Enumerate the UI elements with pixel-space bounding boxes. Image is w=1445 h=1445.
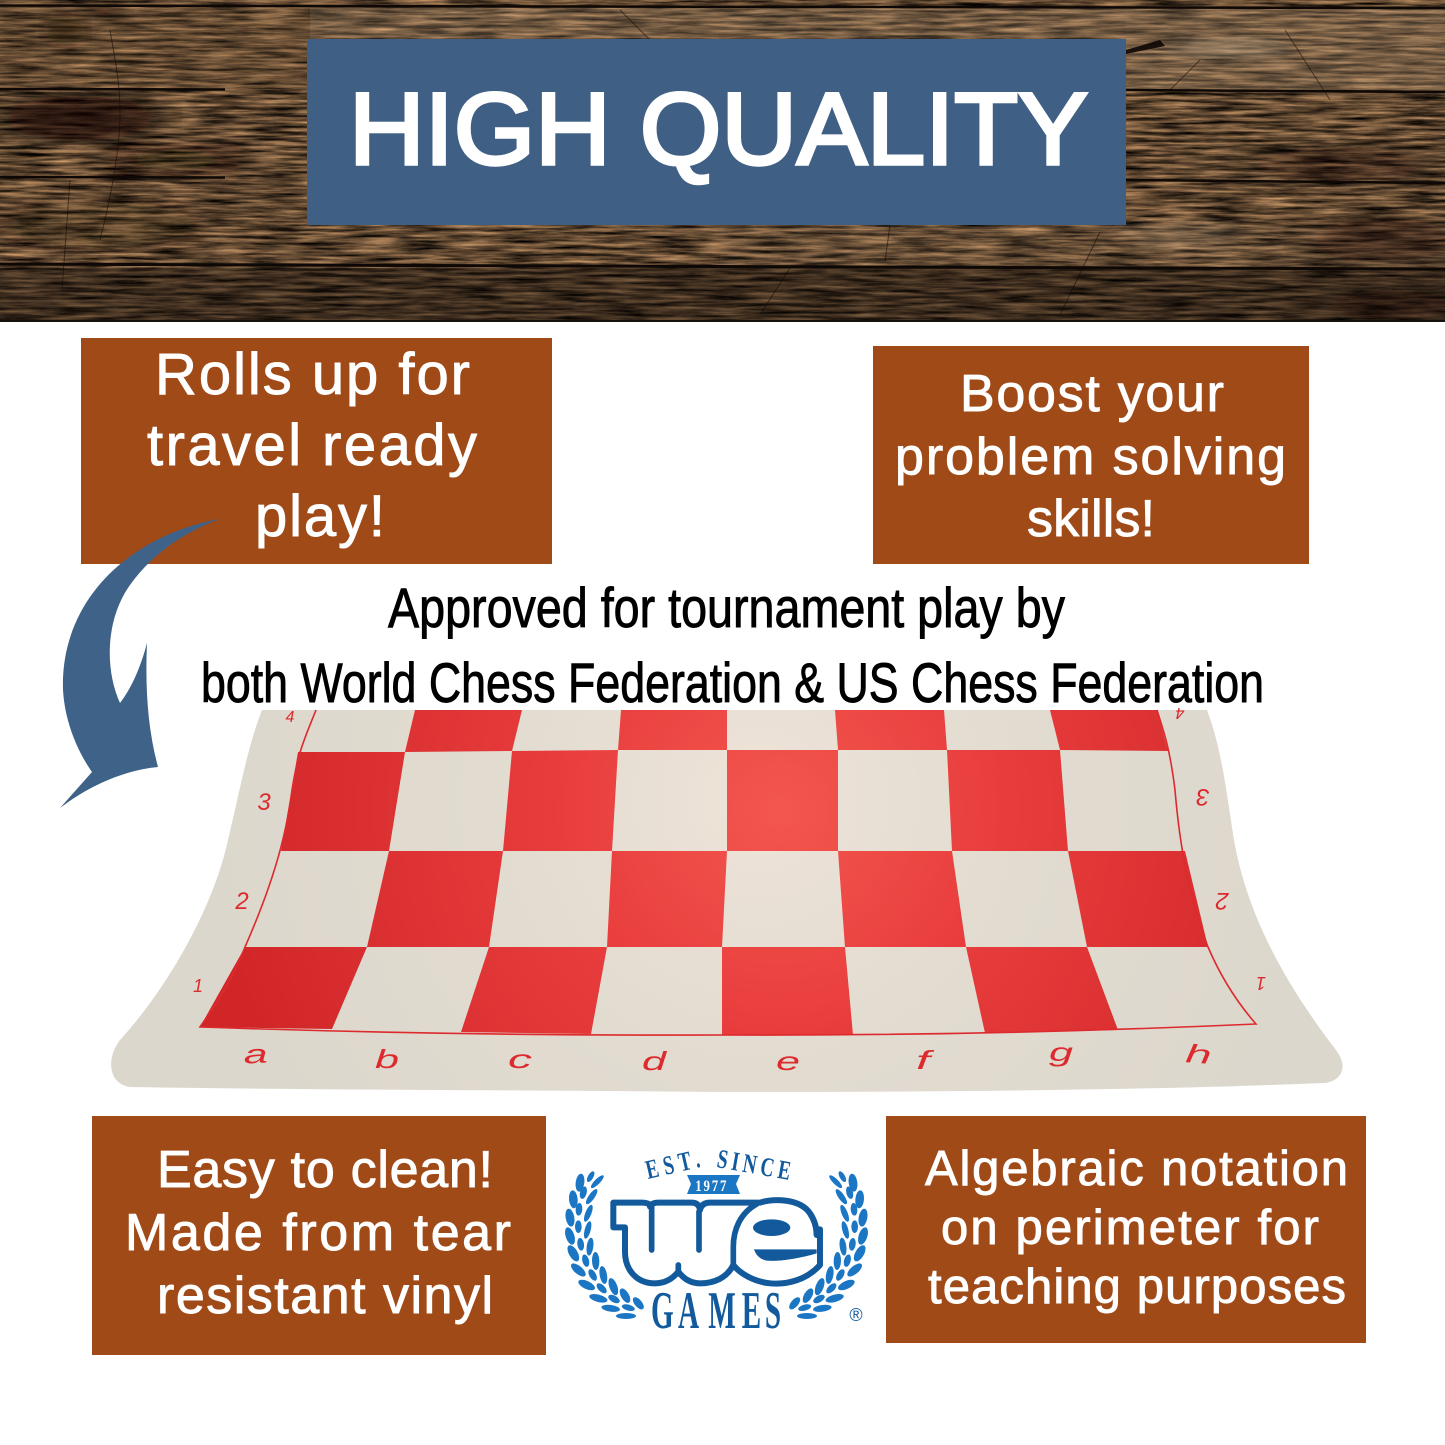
callout: algebraic notation: on perimeter for xyxy=(941,1201,1319,1255)
callout: algebraic notation: Algebraic notation xyxy=(925,1142,1348,1196)
rank numbers left: 1 xyxy=(193,976,203,996)
board outline xyxy=(200,710,1256,1035)
callout: easy to clean: Easy to clean! xyxy=(157,1141,493,1199)
rank numbers left: 3 xyxy=(257,789,271,816)
callout: problem solving: skills! xyxy=(1027,490,1155,548)
title banner xyxy=(307,39,1126,225)
1977 ribbon xyxy=(687,1175,740,1195)
est since text: EST. xyxy=(643,1144,703,1186)
callout: rolls up for travel: travel ready xyxy=(147,413,477,478)
callout: easy to clean xyxy=(92,1116,546,1355)
rank numbers left xyxy=(193,709,295,996)
est since text: SINCE xyxy=(715,1144,793,1187)
chess mat xyxy=(111,704,1343,1092)
file letters: a xyxy=(243,1038,268,1070)
callout: algebraic notation xyxy=(886,1116,1366,1343)
callout: algebraic notation: teaching purposes xyxy=(928,1260,1346,1314)
callout: easy to clean: resistant vinyl xyxy=(157,1267,493,1325)
file letters: g xyxy=(1049,1037,1074,1067)
wood plank header background xyxy=(0,0,1445,322)
file letters: f xyxy=(916,1045,935,1075)
games text: GAMES xyxy=(651,1282,781,1340)
file letters: b xyxy=(375,1044,399,1074)
rank numbers right, inverted: 1 xyxy=(1256,973,1266,993)
rank numbers left: 4 xyxy=(286,709,295,726)
WE wordmark xyxy=(613,1200,820,1284)
rank numbers right, inverted: 3 xyxy=(1196,783,1210,810)
rank numbers left: 2 xyxy=(234,888,249,915)
file letters: c xyxy=(508,1044,532,1074)
callout: problem solving: problem solving xyxy=(895,428,1286,486)
rank numbers right, inverted: 4 xyxy=(1175,704,1184,721)
registered mark: ® xyxy=(849,1305,863,1325)
mat base xyxy=(111,710,1343,1092)
file letters: e xyxy=(776,1046,800,1076)
est since text xyxy=(643,1144,793,1187)
callout: problem solving: Boost your xyxy=(960,365,1224,423)
arrow pointing down to mat xyxy=(60,519,220,808)
rank numbers right, inverted: 2 xyxy=(1215,887,1230,914)
laurel right xyxy=(787,1170,870,1319)
callout: easy to clean: Made from tear xyxy=(125,1204,511,1262)
1977 ribbon: 1977 xyxy=(695,1178,726,1195)
laurel left xyxy=(563,1170,646,1319)
callout: rolls up for travel: Rolls up for xyxy=(155,342,470,407)
title text: HIGH QUALITY xyxy=(349,72,1088,186)
rank numbers right, inverted xyxy=(1175,704,1266,993)
file letters xyxy=(243,1037,1213,1076)
red squares xyxy=(200,710,1208,1035)
file letters: d xyxy=(642,1046,669,1076)
tournament approval text: Approved for tournament play by xyxy=(388,576,1065,639)
tournament approval text xyxy=(201,576,1264,714)
file letters: h xyxy=(1185,1038,1213,1070)
callout: rolls up for travel xyxy=(81,338,552,564)
callout: rolls up for travel: play! xyxy=(255,484,385,549)
logo: WE Games xyxy=(563,1144,870,1340)
callout: problem solving xyxy=(873,346,1309,564)
